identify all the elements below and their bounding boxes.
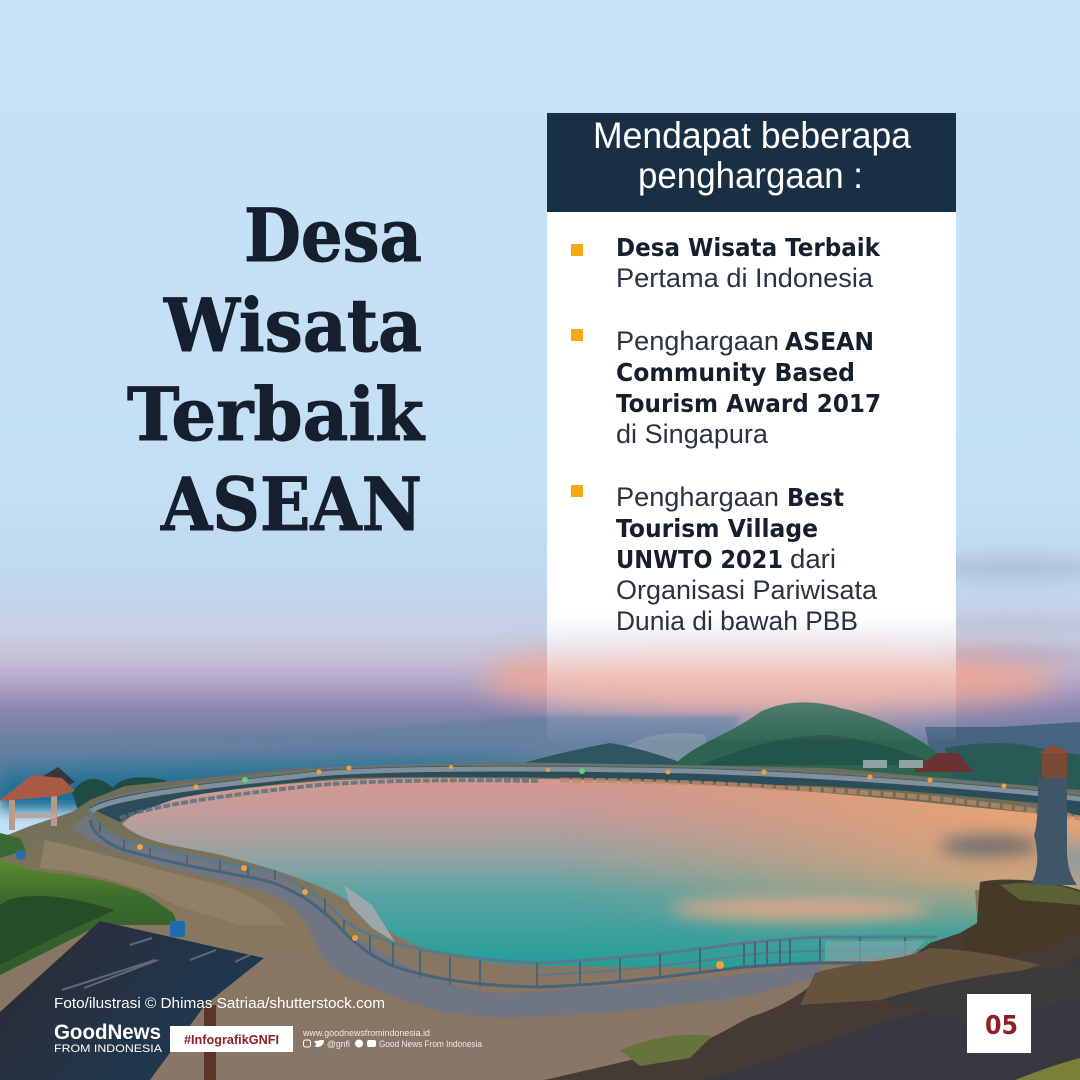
panel header: penghargaan : [638, 155, 863, 196]
logo: GoodNews from Indonesia: FROM INDONESIA [54, 1043, 163, 1055]
award item 2: ASEAN [785, 327, 874, 356]
walkway [72, 815, 826, 1017]
award item 3: UNWTO 2021 [616, 545, 783, 574]
title: Desa [244, 193, 422, 279]
icon: facebook [355, 1040, 363, 1048]
hashtag badge [170, 1026, 293, 1052]
award item 3: Penghargaan [616, 482, 779, 512]
distant mountains [0, 716, 740, 790]
gazebo [9, 798, 15, 830]
ground [0, 762, 1080, 1080]
award item 3: Organisasi Pariwisata [616, 575, 878, 605]
award item 1: Desa Wisata Terbaik [616, 233, 881, 262]
panel header: Mendapat beberapa [593, 115, 911, 156]
distant trees [72, 777, 170, 810]
title: Wisata [163, 283, 422, 369]
award item 1: Pertama di Indonesia [616, 263, 874, 293]
award item 2: Penghargaan [616, 326, 779, 356]
logo: GoodNews from Indonesia [54, 1021, 163, 1055]
award item 3: Dunia di bawah PBB [616, 606, 858, 636]
thatched hut [0, 921, 264, 1080]
award item 3 [571, 482, 878, 636]
tower [1030, 778, 1077, 885]
website and social links: Good News From Indonesia [379, 1039, 482, 1049]
award item 2: Tourism Award 2017 [616, 389, 881, 418]
logo: GoodNews from Indonesia: GoodNews [54, 1021, 161, 1044]
buildings on the hill [915, 753, 974, 772]
page number [967, 994, 1031, 1053]
panel header [547, 113, 956, 212]
background photo: sky, lake and landscape [0, 542, 1080, 1080]
award item 3: Tourism Village [616, 514, 818, 543]
award item 2: di Singapura [616, 419, 769, 449]
far railing [92, 764, 1080, 806]
lake [122, 778, 1080, 968]
near railing [90, 810, 937, 963]
lanterns [137, 765, 1006, 969]
rocky foreground [544, 880, 1080, 1080]
hashtag badge: #InfografikGNFI [184, 1032, 279, 1047]
award item 1 [571, 233, 881, 293]
sandy patch on the left [40, 840, 285, 925]
photo credit: Foto/ilustrasi © Dhimas Satriaa/shutterstock.com [54, 996, 385, 1012]
website and social links [302, 1028, 482, 1049]
title [127, 193, 425, 548]
website and social links: www.goodnewsfromindonesia.id [302, 1028, 430, 1038]
title: Terbaik [127, 372, 425, 458]
reflected fence [120, 780, 540, 818]
award item 3: dari [790, 544, 836, 574]
panel: awards [547, 113, 956, 740]
website and social links: @gnfi [327, 1039, 350, 1049]
icon: instagram [304, 1040, 310, 1047]
icon: twitter [314, 1040, 324, 1047]
panel body with fading white background [547, 212, 956, 740]
award item 2 [571, 326, 881, 449]
icon: youtube [367, 1040, 376, 1047]
page number: 05 [985, 1011, 1018, 1041]
slope under the rail [344, 885, 395, 942]
forested hill [672, 702, 960, 790]
award item 2: Community Based [616, 358, 855, 387]
grass [0, 860, 178, 975]
water seen under the far right fence [825, 941, 925, 961]
title: ASEAN [160, 462, 422, 548]
causeway top [90, 766, 1080, 822]
award item 3: Best [787, 483, 844, 512]
